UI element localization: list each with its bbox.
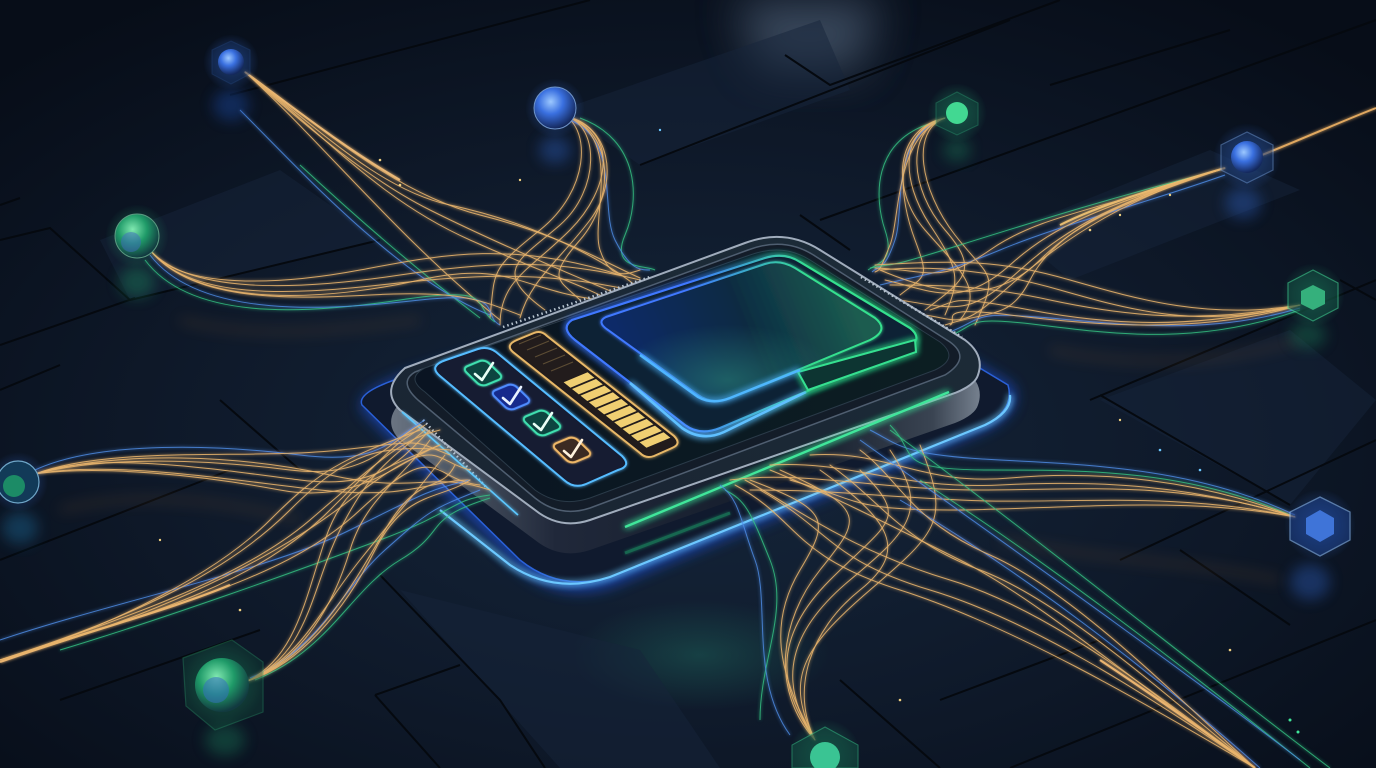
strand bundle from bottom green cube: [720, 445, 936, 740]
tick 3: [534, 413, 552, 430]
node: lower-left green cube: [180, 640, 264, 756]
strand bundle from top blue sphere: [490, 116, 655, 325]
check blue: [490, 383, 532, 411]
data strands: lower left: [0, 420, 490, 682]
lower neon frame edge: [630, 383, 806, 436]
strand bundle from lower-left edge: [0, 425, 490, 662]
checklist panel: [435, 348, 626, 486]
green tab: [798, 340, 916, 390]
chip top surface: [391, 237, 980, 523]
data strands: upper left: [145, 72, 655, 325]
contact pins: [423, 277, 962, 487]
node: left glass sphere: [0, 452, 48, 544]
green edge light: [625, 392, 949, 527]
strand bundle from right blue cube: [870, 108, 1376, 325]
screen green bloom: [601, 262, 881, 401]
main screen: [601, 262, 881, 401]
chip metal side: [391, 267, 980, 553]
base plate surface: [361, 260, 1009, 582]
bar frame: [510, 332, 678, 457]
panel frame: [435, 348, 626, 486]
strand bundle from top green cube: [868, 118, 989, 325]
data strands: lower right: [720, 425, 1330, 768]
sparkle particles: [159, 129, 1299, 734]
green reflection light: [625, 513, 730, 553]
node: bottom green cube: [789, 719, 861, 768]
node: top green cube: [927, 83, 987, 162]
main screen outer frame: [567, 256, 916, 431]
strand bundle from right blue cube: [730, 425, 1295, 517]
strand bundle from left green sphere: [145, 250, 640, 325]
check green 1: [462, 359, 504, 387]
strand bundle from top-left blue node: [240, 72, 640, 320]
check gold: [551, 436, 593, 464]
strand bundle from right green cube: [875, 262, 1300, 338]
strand bundle to lower-right edge: [735, 430, 1330, 768]
check green 2: [521, 409, 563, 437]
node: right lower blue cube: [1284, 489, 1356, 600]
node: top blue sphere: [525, 78, 585, 164]
screen lower neon edge: [640, 355, 800, 401]
node: right blue cube: [1213, 123, 1281, 219]
tick 4: [564, 440, 582, 457]
cyan edge light: [402, 412, 518, 515]
strand bundle from left sphere: [35, 420, 490, 493]
data strands: upper right: [868, 108, 1376, 338]
gold progress bar: [510, 332, 678, 457]
filled segments: [564, 372, 670, 448]
base plate under the chip: [361, 260, 1015, 592]
node: top-left blue sphere: [203, 34, 259, 121]
node: left green sphere: [105, 204, 169, 298]
strand bundle from lower-left cube: [245, 430, 490, 682]
empty segments: [519, 335, 573, 371]
chip tray: [415, 250, 949, 502]
tick 2: [503, 387, 521, 404]
chip body: [391, 237, 980, 553]
tick 1: [475, 363, 493, 380]
base neon edge: [440, 395, 1010, 584]
chip tray rim: [407, 244, 960, 511]
light reflections of strands on floor: [60, 320, 1300, 580]
base blue glow: [361, 260, 1015, 592]
node: right green cube: [1281, 263, 1345, 349]
